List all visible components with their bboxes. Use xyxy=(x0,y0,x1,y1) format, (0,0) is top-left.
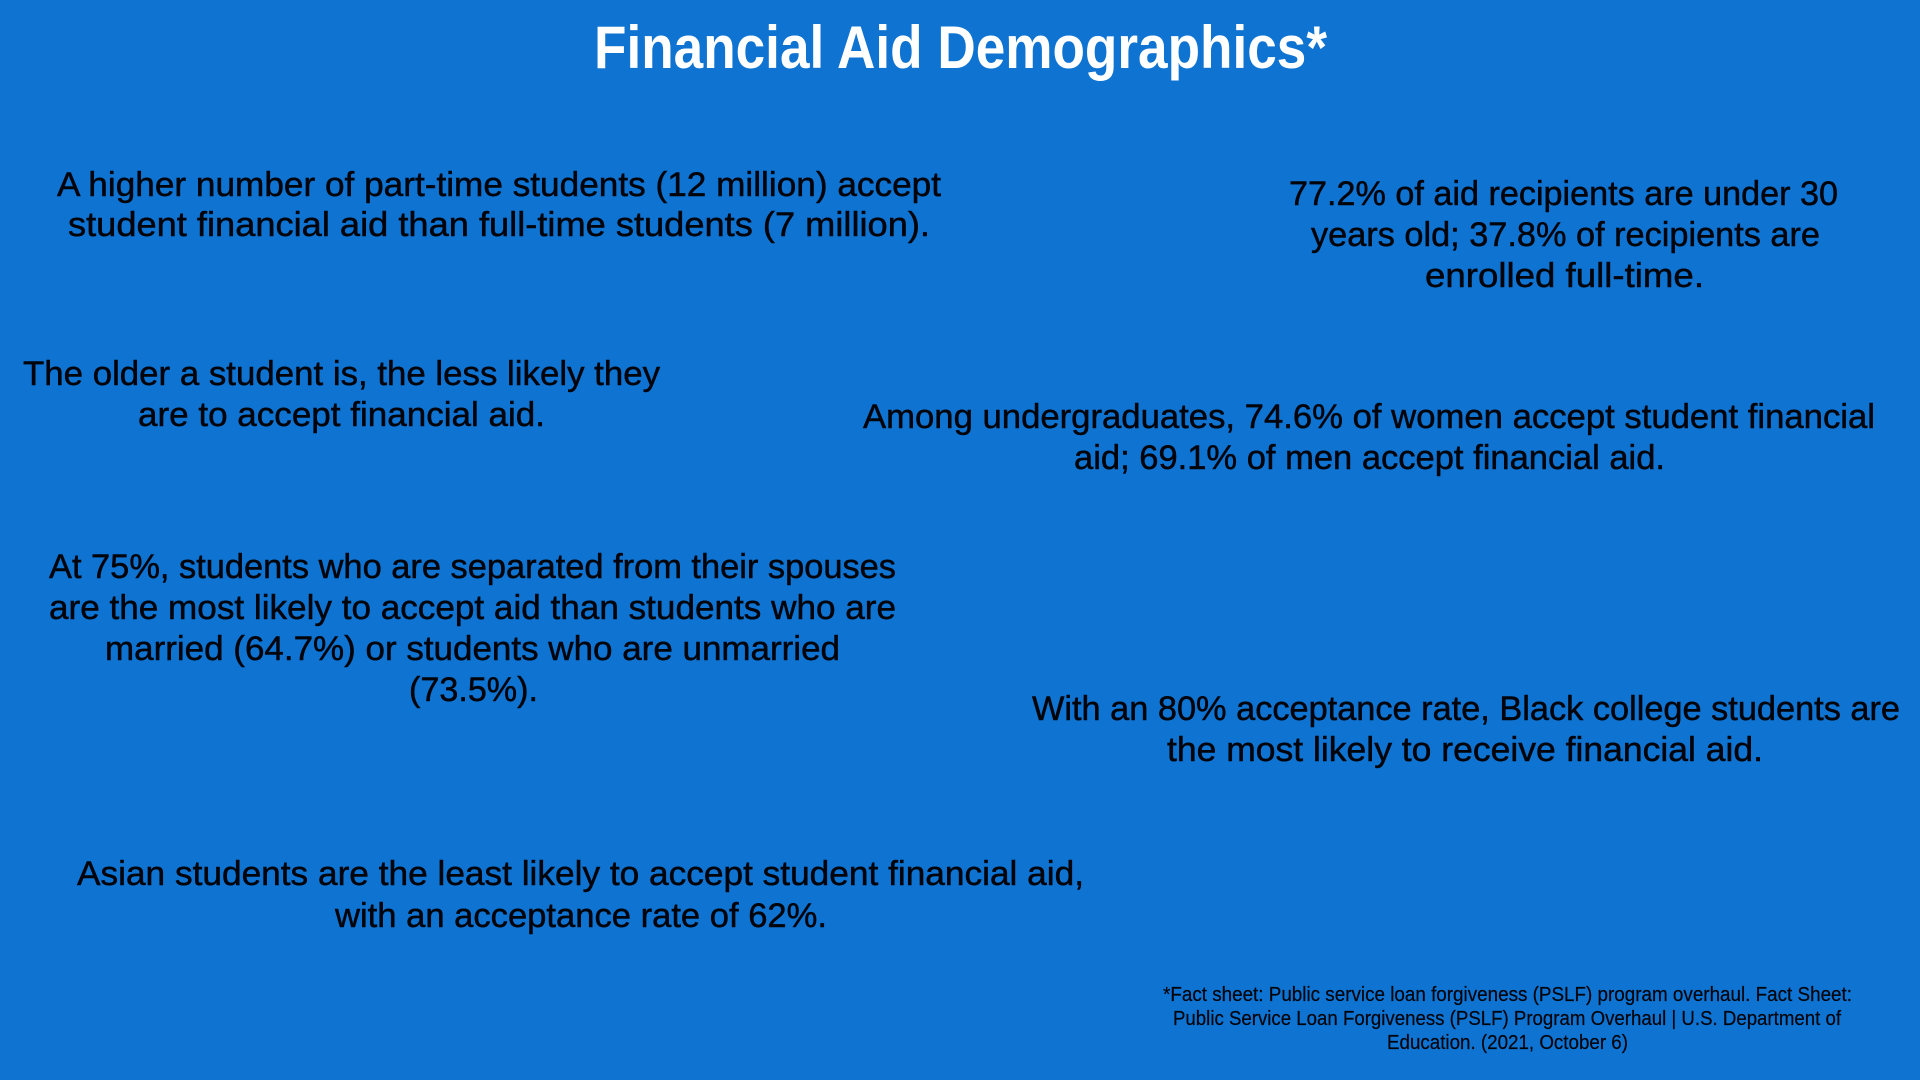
footnote: source citation: Education. (2021, October 6) xyxy=(1387,1032,1628,1054)
text block: Asian students: with an acceptance rate of 62%. xyxy=(334,897,827,935)
title: Financial Aid Demographics* xyxy=(594,14,1328,81)
text block: Asian students xyxy=(77,855,1084,935)
text block: older students xyxy=(23,355,660,434)
text block: marital status: are the most likely to accept aid than students who are xyxy=(49,589,896,627)
text block: marital status: (73.5%). xyxy=(409,671,538,709)
text block: aid recipients age and enrollment: 77.2% of aid recipients are under 30 xyxy=(1289,175,1838,213)
footnote: source citation xyxy=(1163,984,1852,1054)
text block: aid recipients age and enrollment xyxy=(1289,175,1838,295)
text block: marital status: At 75%, students who are separated from their spouses xyxy=(49,548,896,586)
text block: Black college students xyxy=(1032,690,1900,769)
text block: marital status xyxy=(49,548,896,709)
text block: women and men undergraduates xyxy=(863,398,1875,477)
text block: Black college students: the most likely to receive financial aid. xyxy=(1167,731,1763,769)
text block: part-time vs full-time students xyxy=(57,166,942,244)
footnote: source citation: *Fact sheet: Public service loan forgiveness (PSLF) program overhaul. Fact Sheet: xyxy=(1163,984,1852,1006)
text block: Black college students: With an 80% acceptance rate, Black college students are xyxy=(1032,690,1900,728)
text block: older students: are to accept financial aid. xyxy=(138,396,545,434)
text block: women and men undergraduates: Among undergraduates, 74.6% of women accept student financial xyxy=(863,398,1875,436)
footnote: source citation: Public Service Loan Forgiveness (PSLF) Program Overhaul | U.S. Department of xyxy=(1173,1008,1841,1030)
text block: women and men undergraduates: aid; 69.1% of men accept financial aid. xyxy=(1074,439,1665,477)
text block: part-time vs full-time students: A higher number of part-time students (12 million) accept xyxy=(57,166,942,204)
text block: older students: The older a student is, the less likely they xyxy=(23,355,660,393)
text block: part-time vs full-time students: student financial aid than full-time students (7 million). xyxy=(68,206,930,244)
text block: Asian students: Asian students are the least likely to accept student financial aid, xyxy=(77,855,1084,893)
text block: aid recipients age and enrollment: enrolled full-time. xyxy=(1425,257,1704,295)
text block: aid recipients age and enrollment: years old; 37.8% of recipients are xyxy=(1311,216,1820,254)
text block: marital status: married (64.7%) or students who are unmarried xyxy=(105,630,840,668)
